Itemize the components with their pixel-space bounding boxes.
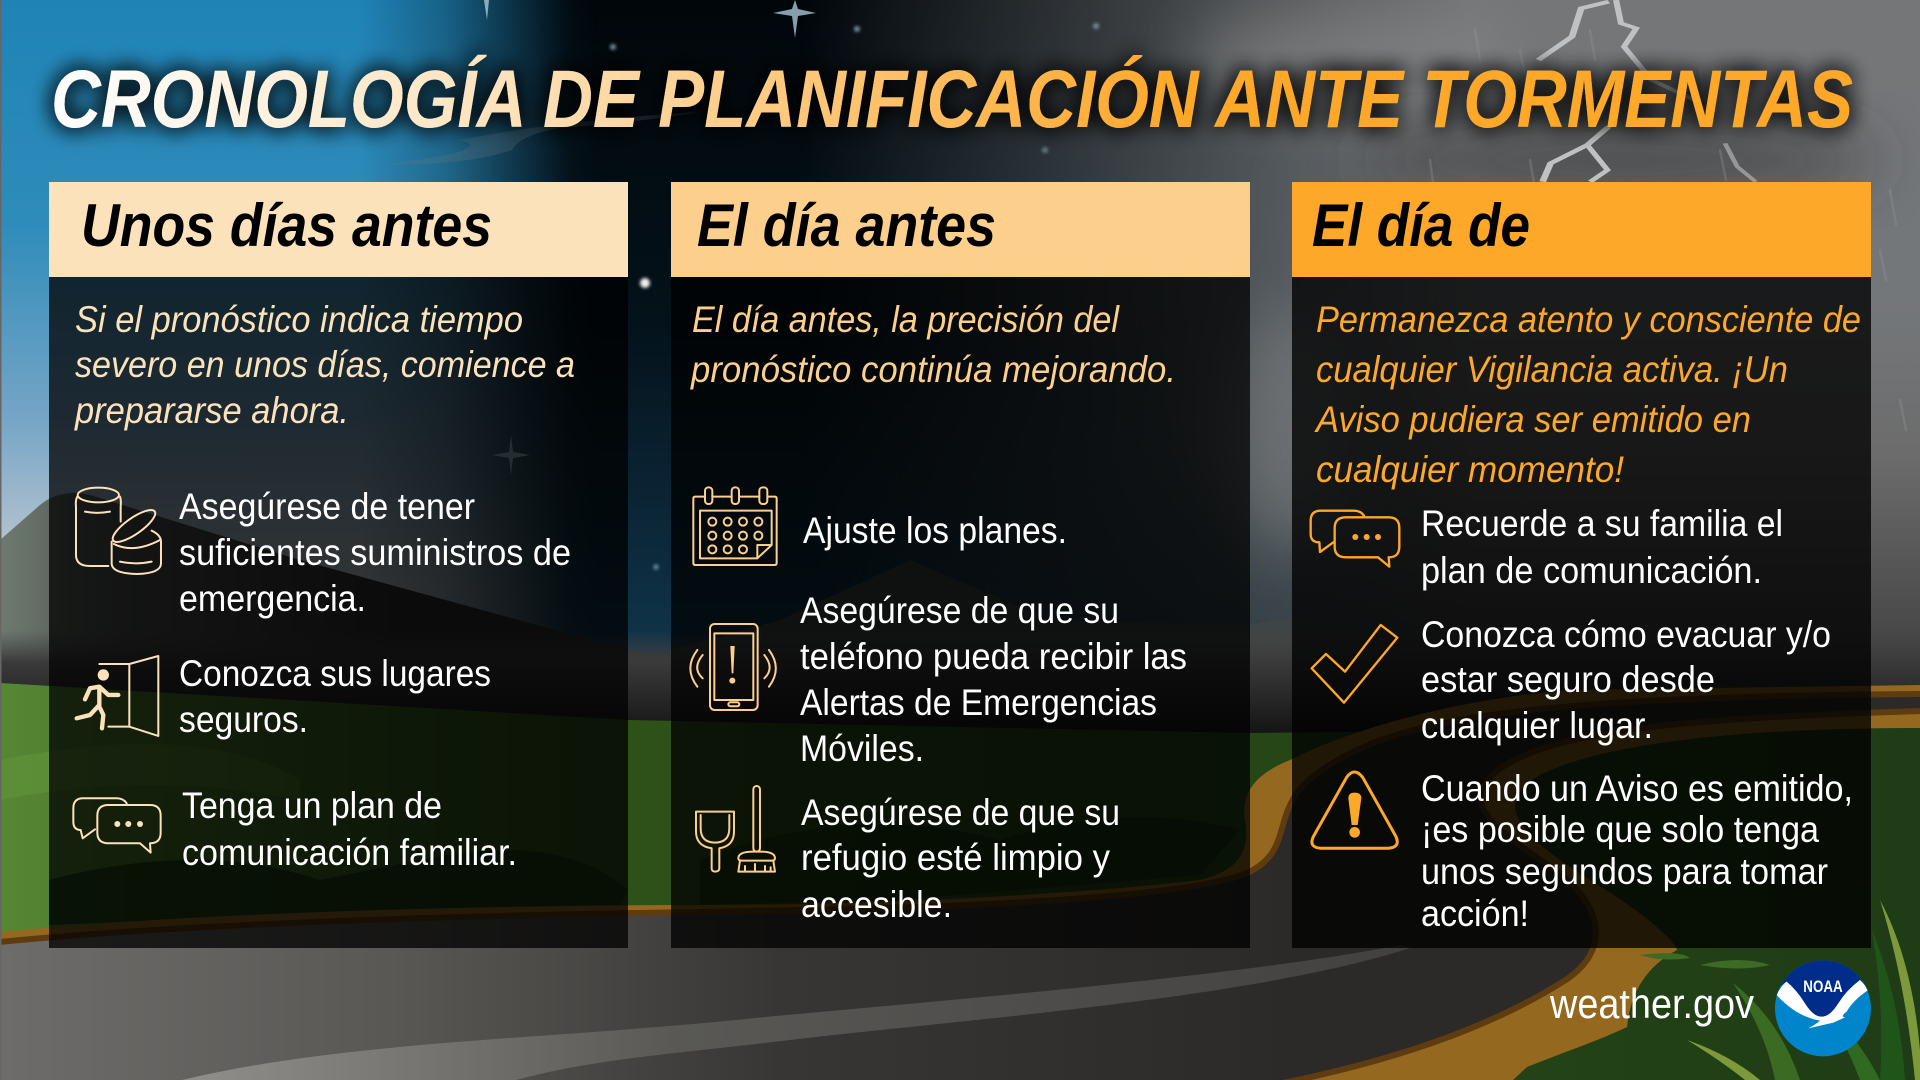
intro text: [1314, 299, 1861, 490]
item text: plan de comunicación: comunicación familiar.: [182, 832, 517, 873]
panel: el día de: [1292, 182, 1871, 948]
icon: check mark: [1312, 625, 1397, 703]
intro text: [690, 299, 1176, 390]
header: unos días antes: Unos días antes: [81, 192, 492, 259]
item text: alertas: Asegúrese de que su: [800, 590, 1119, 631]
intro text: Si el pronóstico indica tiempo: [75, 299, 523, 340]
item text: suministros: [179, 486, 571, 619]
item text: alertas: Alertas de Emergencias: [800, 682, 1157, 723]
item text: refugio: Asegúrese de que su: [801, 792, 1120, 833]
mountains: [0, 493, 700, 700]
lightning bolts: [1538, 0, 1756, 182]
intro text: cualquier Vigilancia activa. ¡Un: [1316, 349, 1788, 390]
icon: calendar: [693, 487, 777, 565]
website label: weather.gov: [1549, 980, 1754, 1027]
road shoulder: [0, 685, 1920, 1080]
item text: alertas: [800, 590, 1187, 769]
grass: [0, 683, 1920, 1080]
header: el día de: El día de: [1312, 192, 1530, 259]
panel: el día antes: [671, 182, 1250, 948]
header: el día de: [1292, 182, 1871, 277]
item text: evacuar: [1421, 614, 1831, 746]
item text: alertas: teléfono pueda recibir las: [800, 636, 1187, 677]
item text: suministros: suficientes suministros de: [179, 532, 571, 573]
item text: recuerde: [1421, 503, 1783, 591]
item text: lugares seguros: [179, 653, 491, 740]
item text: aviso: [1421, 768, 1853, 934]
icon: chat bubbles: [73, 798, 161, 853]
item text: plan de comunicación: Tenga un plan de: [182, 785, 442, 826]
item text: refugio: refugio esté limpio y: [801, 837, 1110, 878]
icon: NOAA logo: [1775, 960, 1872, 1056]
item text: aviso: ¡es posible que solo tenga: [1421, 809, 1819, 850]
intro text: El día antes, la precisión del: [692, 299, 1121, 340]
icon: chat bubbles: [1311, 511, 1399, 567]
item text: aviso: unos segundos para tomar: [1421, 851, 1828, 892]
icon: dustpan and broom: [696, 786, 775, 872]
item text: recuerde: plan de comunicación.: [1421, 550, 1762, 591]
rain: [1430, 30, 1906, 430]
road: [0, 697, 1920, 1080]
item text: aviso: Cuando un Aviso es emitido,: [1421, 768, 1853, 809]
header: unos días antes: [49, 182, 628, 277]
item text: evacuar: Conozca cómo evacuar y/o: [1421, 614, 1831, 655]
item text: plan de comunicación: [182, 785, 517, 873]
item text: lugares seguros: seguros.: [179, 699, 308, 740]
item text: refugio: [801, 792, 1120, 925]
intro text: pronóstico continúa mejorando.: [690, 349, 1176, 390]
panel: unos días antes: [49, 182, 628, 948]
header: el día antes: [671, 182, 1250, 277]
icon: warning triangle: [1312, 772, 1397, 848]
item text: recuerde: Recuerde a su familia el: [1421, 503, 1783, 544]
intro text: cualquier momento!: [1316, 449, 1624, 490]
stars: [484, 0, 1099, 570]
item text: aviso: acción!: [1421, 893, 1529, 934]
item text: suministros: emergencia.: [179, 578, 366, 619]
intro text: severo en unos días, comience a: [75, 344, 575, 385]
item text: suministros: Asegúrese de tener: [179, 486, 475, 527]
intro text: Permanezca atento y consciente de: [1316, 299, 1861, 340]
intro text: [74, 299, 575, 431]
item text: alertas: Móviles.: [800, 728, 924, 769]
item text: refugio: accesible.: [801, 884, 952, 925]
icon: person running to door: [77, 656, 158, 736]
item text: evacuar: estar seguro desde: [1421, 659, 1715, 700]
icon: NOAA logo: NOAA: [1803, 977, 1843, 996]
intro text: prepararse ahora.: [74, 390, 349, 431]
item text: evacuar: cualquier lugar.: [1421, 705, 1653, 746]
item text: lugares seguros: Conozca sus lugares: [179, 653, 491, 694]
header: el día antes: El día antes: [697, 192, 996, 259]
icon: cans: [76, 488, 161, 574]
intro text: Aviso pudiera ser emitido en: [1314, 399, 1751, 440]
icon: phone alert: [690, 624, 776, 710]
foreground grass: [1733, 983, 1800, 1080]
item text: ajuste: Ajuste los planes.: [803, 510, 1067, 551]
